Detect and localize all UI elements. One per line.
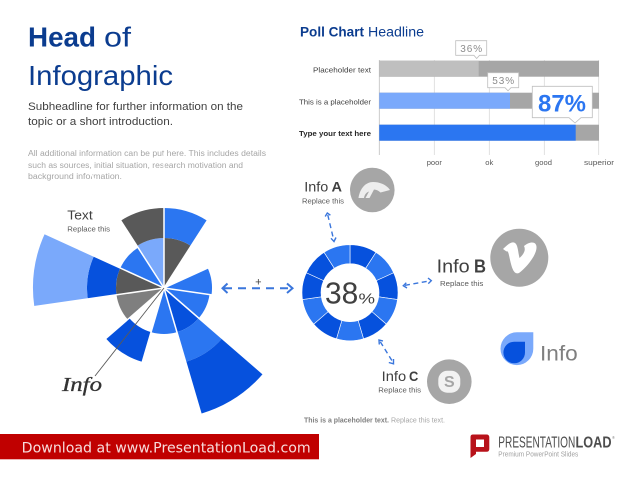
arrow: polar chart to donut: + <box>255 276 262 288</box>
icon: skype: S <box>444 374 455 391</box>
info B label: Info <box>437 256 470 277</box>
sector 11 <box>121 197 187 288</box>
info A label: Info <box>304 180 328 195</box>
axis labels: good <box>535 158 552 167</box>
sector 6 <box>140 288 177 339</box>
poll chart heading <box>300 25 424 40</box>
axis labels: superior <box>584 158 615 167</box>
subheadline: Subheadline for further information on the <box>28 101 243 113</box>
donut chart <box>297 238 404 346</box>
arrow: donut to info A <box>325 213 336 242</box>
bar labels: This is a placeholder <box>299 98 371 107</box>
footnote text: This is a placeholder text. <box>304 418 389 425</box>
bar: placeholder text 36% <box>379 61 599 77</box>
title: of <box>104 22 131 53</box>
subheadline <box>28 101 243 128</box>
donut value: 38 <box>325 275 358 310</box>
PresentationLoad logo <box>470 434 615 459</box>
info B label <box>437 256 486 288</box>
icon: deviantart <box>350 168 395 212</box>
sector 7 <box>102 313 153 362</box>
leader line to Info <box>95 288 164 376</box>
bar labels: Placeholder text <box>313 66 372 74</box>
info A label: Replace this <box>302 196 344 205</box>
axis labels: ok <box>485 158 494 167</box>
title <box>28 22 173 91</box>
info B label: Replace this <box>440 279 484 288</box>
info C label: Info <box>382 369 406 384</box>
PresentationLoad logo: PRESENTATION <box>498 434 575 451</box>
arrow: donut to info C <box>379 340 394 364</box>
additional information text: such as sources, initial situation, research motivation and <box>28 161 243 170</box>
info C label: Replace this <box>378 385 421 394</box>
callout: 36% <box>456 41 487 58</box>
bar: type your text here 87% <box>379 125 599 141</box>
arrow: polar chart to donut <box>222 276 292 293</box>
bar labels: Type your text here <box>299 129 371 138</box>
sector 4 <box>160 288 210 319</box>
sector 9: light blue wedge <box>24 227 164 307</box>
sector 1 <box>164 208 207 288</box>
text label <box>67 207 110 234</box>
text label: Text <box>67 207 93 222</box>
footnote text: Replace this text. <box>391 418 445 425</box>
callout: 53% <box>488 73 519 91</box>
axis labels: poor <box>427 158 442 167</box>
info C label <box>378 369 421 394</box>
sector 5: largest wedge <box>148 288 263 427</box>
sector 8 <box>111 268 164 319</box>
icon: droplet <box>500 332 533 365</box>
info A label: A <box>332 180 342 195</box>
title: Head <box>28 22 96 53</box>
text label: Replace this <box>67 225 110 234</box>
subheadline: topic or a short introduction. <box>28 116 173 128</box>
download banner <box>0 434 319 459</box>
icon: vimeo <box>490 229 548 287</box>
axis labels <box>427 158 615 167</box>
droplet info marker <box>500 332 578 366</box>
donut value <box>325 275 375 310</box>
additional information text <box>28 149 266 181</box>
callout: 87% <box>532 86 592 123</box>
sector 10 <box>120 244 175 288</box>
bar labels <box>299 66 372 138</box>
poll chart heading: Poll Chart <box>300 25 364 40</box>
PresentationLoad logo: ® <box>612 435 615 440</box>
download banner: Download at www.PresentationLoad.com <box>22 440 311 456</box>
PresentationLoad logo: Premium PowerPoint Slides <box>498 452 579 459</box>
info B label: B <box>474 256 486 277</box>
donut value: % <box>358 290 375 307</box>
info A label <box>302 180 344 205</box>
bar: this is a placeholder 53% <box>379 93 599 109</box>
PresentationLoad logo: LOAD <box>576 434 612 451</box>
poll chart heading: Headline <box>368 25 424 40</box>
sector 3 <box>164 268 218 312</box>
additional information text: All additional information can be put here. This includes details <box>28 149 266 158</box>
droplet info marker: Info <box>540 343 578 366</box>
additional information text: background information. <box>28 172 122 181</box>
handwritten Info label: Info <box>61 374 102 396</box>
title: Infographic <box>28 60 173 91</box>
icon: skype <box>427 359 472 404</box>
poll bar chart <box>299 41 615 167</box>
callout: 87%: 87% <box>538 90 586 118</box>
info C label: C <box>409 369 419 384</box>
arrow: donut to info B <box>403 278 431 288</box>
callout: 53%: 53% <box>492 76 514 87</box>
polar area chart <box>24 153 298 427</box>
icon: logo mark <box>470 434 489 458</box>
callout: 36%: 36% <box>460 44 482 55</box>
footnote text <box>304 418 445 425</box>
